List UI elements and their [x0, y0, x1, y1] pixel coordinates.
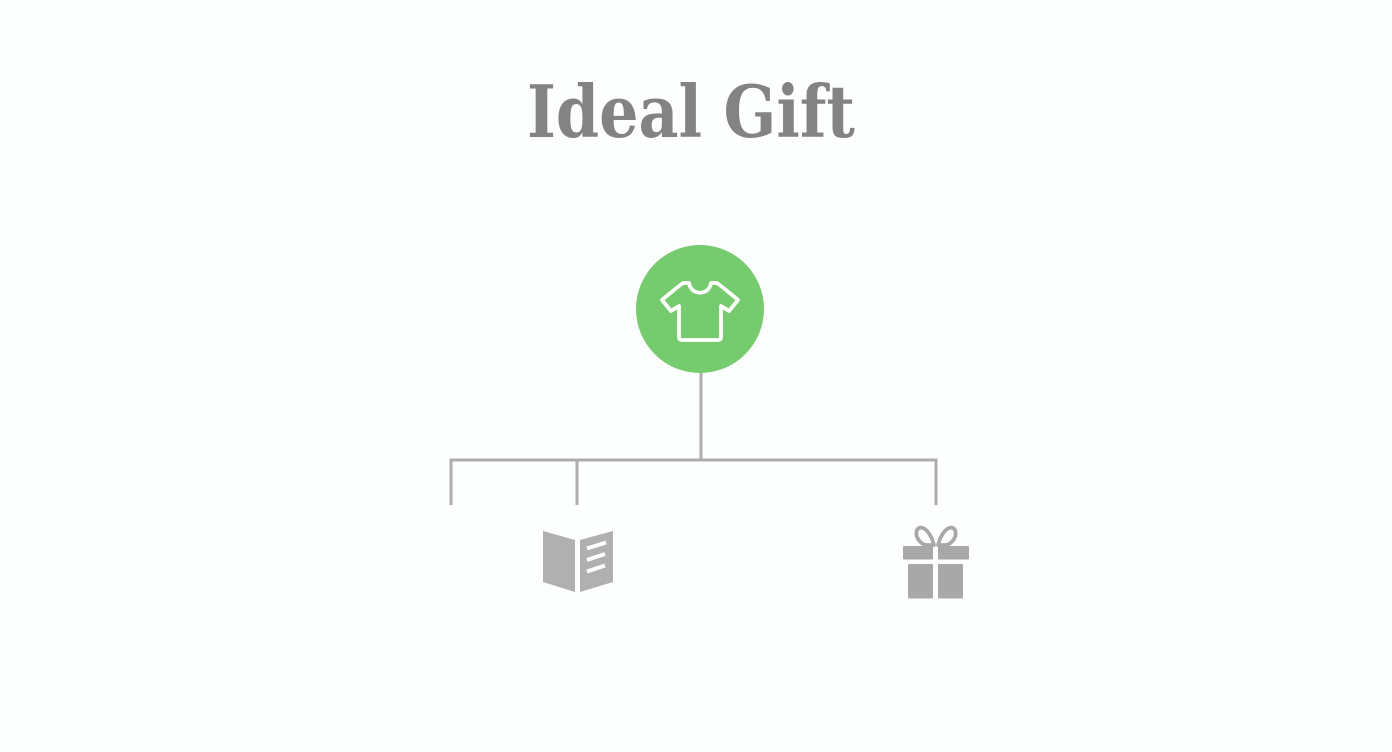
icon: open book	[543, 531, 613, 592]
icon: t-shirt outline	[662, 283, 738, 340]
connector tree	[451, 371, 936, 505]
icon: green circle with t-shirt	[636, 245, 764, 373]
title: Ideal Gift	[527, 69, 855, 154]
icon: gift box	[903, 528, 969, 598]
